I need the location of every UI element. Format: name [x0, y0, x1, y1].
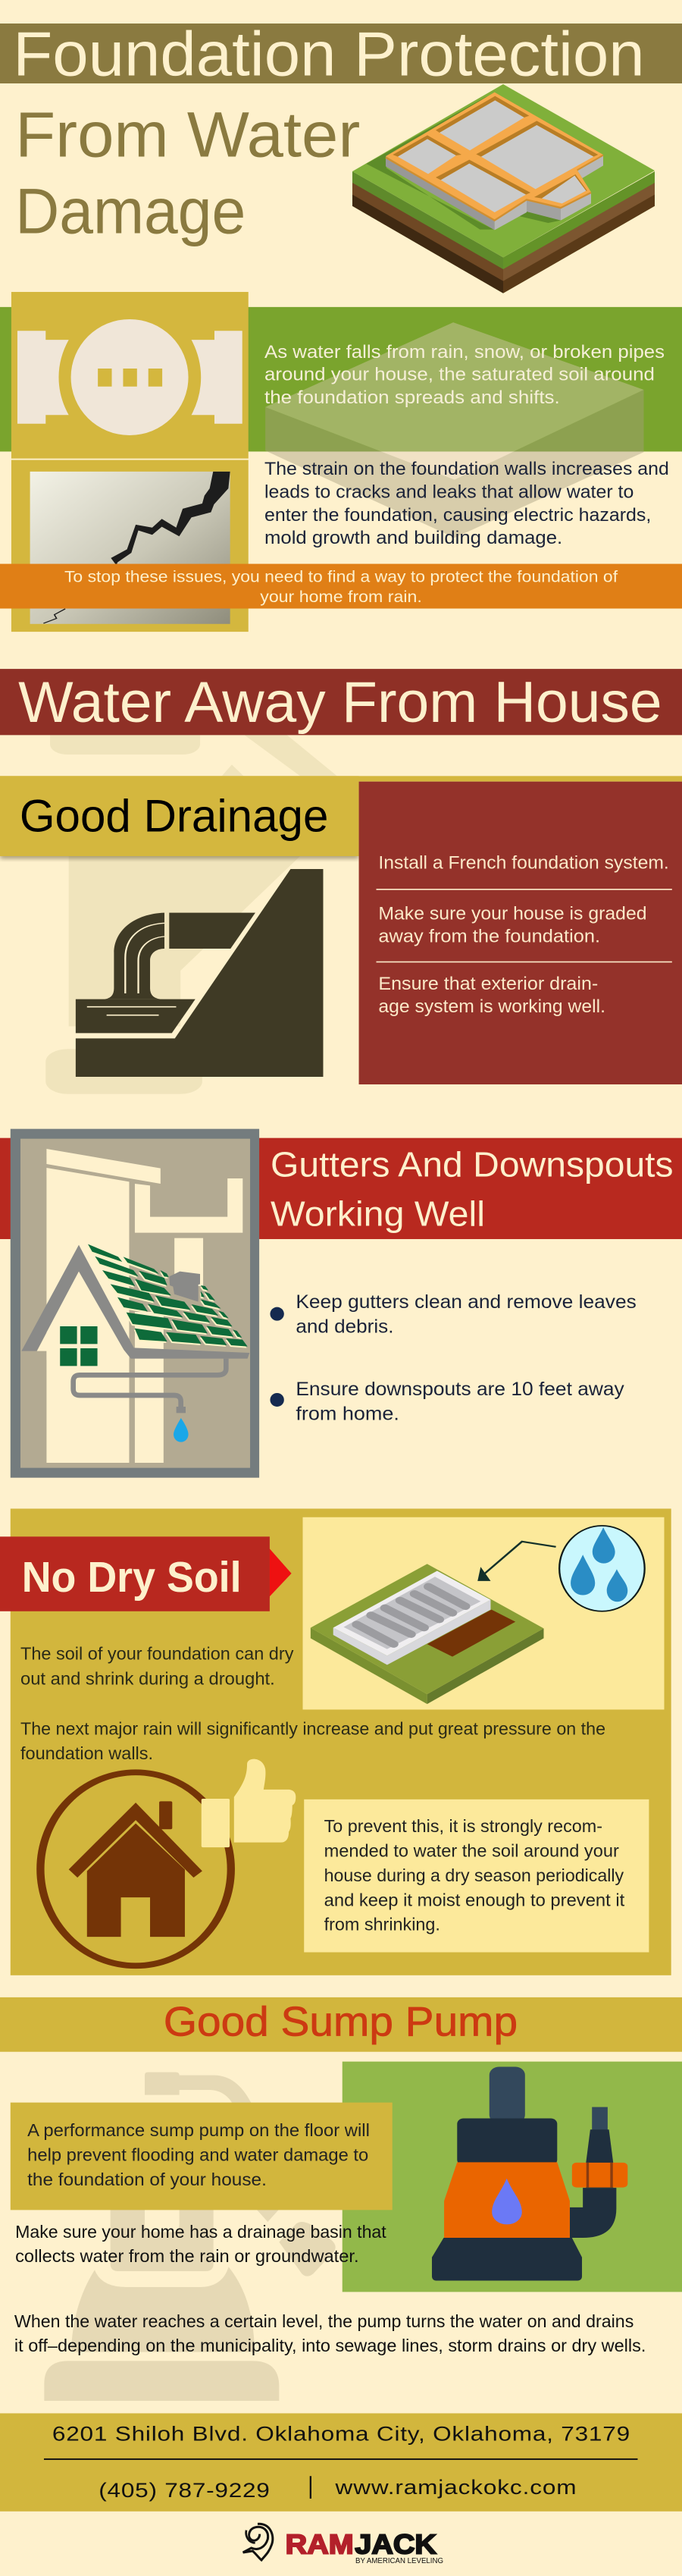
callout: prevent: To prevent this, it is strongly recom- — [324, 1817, 602, 1836]
title line 2: Damage — [15, 175, 246, 247]
icon: ram head — [243, 2524, 273, 2560]
heading: no dry soil: No Dry Soil — [22, 1553, 242, 1602]
heading: good sump pump — [0, 1997, 682, 2052]
icon: house in ring — [40, 1772, 231, 1966]
text: water falling: the foundation spreads and shifts. — [264, 387, 560, 407]
green band — [0, 307, 682, 451]
heading: gutters: Working Well — [271, 1194, 485, 1234]
panel: good drainage — [0, 776, 682, 1084]
watermark: background downspout — [45, 711, 337, 1094]
orange callout: your home from rain. — [260, 587, 422, 606]
icon: sump pump — [432, 2067, 627, 2281]
text: next major rain — [20, 1719, 605, 1763]
watermark: pump — [44, 2072, 336, 2401]
callout: prevent — [304, 1799, 649, 1952]
icon: house with gutter — [11, 1129, 259, 1478]
text: strain: mold growth and building damage. — [264, 527, 562, 548]
footer contact band — [0, 2413, 682, 2512]
title line 2: From Water — [15, 99, 360, 171]
orange callout — [0, 564, 682, 609]
icon: cracked wall — [11, 460, 249, 632]
text: drainage basin: collects water from the rain or groundwater. — [15, 2247, 359, 2267]
icon: isometric foundation block — [352, 84, 655, 293]
logo: ram jack: JACK — [355, 2529, 436, 2559]
green pump panel — [343, 2062, 682, 2292]
icon: valve — [11, 292, 249, 459]
panel: no dry soil — [0, 1508, 671, 1975]
yellow callout: A performance sump pump on the floor will — [27, 2121, 370, 2141]
bullet list: and debris. — [296, 1316, 393, 1337]
text: drainage basin: Make sure your home has a drainage basin that — [15, 2223, 386, 2242]
yellow callout: the foundation of your house. — [27, 2170, 267, 2190]
text: water level — [14, 2312, 646, 2356]
panel: header — [0, 19, 682, 293]
text: water falling — [264, 341, 665, 407]
heading shadow — [0, 849, 359, 859]
callout: prevent: from shrinking. — [324, 1915, 440, 1934]
text: strain — [264, 458, 669, 548]
heading: good sump pump: Good Sump Pump — [164, 1998, 518, 2044]
yellow background — [11, 1508, 671, 1975]
footer contact band: (405) 787-9229 — [99, 2479, 270, 2502]
text: drainage basin — [15, 2223, 386, 2267]
text: next major rain: foundation walls. — [20, 1743, 153, 1763]
heading: no dry soil — [0, 1536, 292, 1611]
icon: drain pipe and slope — [76, 869, 323, 1077]
footer contact band: www.ramjackokc.com — [334, 2476, 577, 2499]
watermark hexagon — [265, 322, 644, 538]
heading: gutters — [0, 1138, 682, 1239]
logo: ram jack — [243, 2524, 443, 2565]
logo: ram jack: RAM — [286, 2529, 354, 2559]
red tips panel — [359, 782, 682, 1084]
icon: thumbs up — [202, 1759, 296, 1847]
panel: gutters and downspouts — [0, 1129, 682, 1478]
bullet list: from home. — [296, 1403, 399, 1424]
heading: good drainage — [0, 776, 682, 856]
yellow callout: help prevent flooding and water damage to — [27, 2145, 368, 2165]
title line 2 — [15, 99, 360, 247]
logo: ram jack: BY AMERICAN LEVELING — [355, 2557, 443, 2565]
bullet list — [270, 1291, 637, 1424]
yellow callout — [11, 2103, 393, 2210]
panel: intro — [0, 292, 682, 632]
text: soil can dry — [20, 1644, 294, 1689]
panel: sump pump — [0, 1997, 682, 2512]
heading: good drainage: Good Drainage — [20, 791, 328, 841]
illustration panel — [303, 1517, 664, 1709]
text: soil can dry: The soil of your foundation can dry — [20, 1644, 294, 1664]
footer contact band: 6201 Shiloh Blvd. Oklahoma City, Oklahoma, 73179 — [52, 2423, 630, 2446]
text: soil can dry: out and shrink during a drought. — [20, 1669, 275, 1689]
